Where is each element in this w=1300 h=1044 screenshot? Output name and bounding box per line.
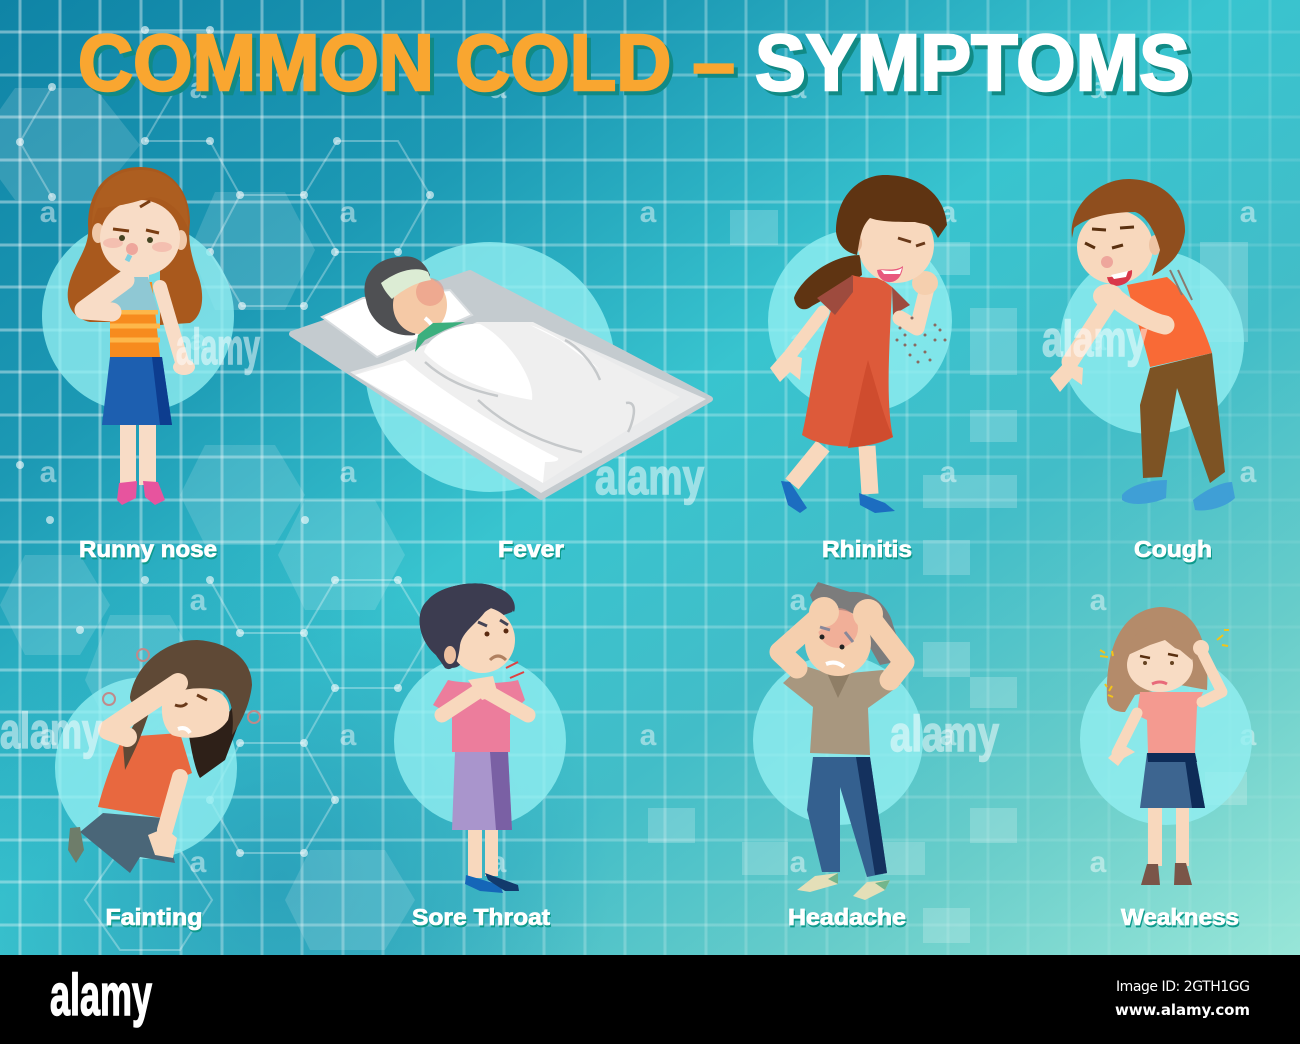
watermark: alamy tiles: a <box>190 324 207 357</box>
label: cough: Cough <box>1134 536 1212 562</box>
symptom: fever <box>292 242 710 497</box>
symptom: runny nose <box>42 167 234 505</box>
watermark: alamy tiles: a <box>640 196 657 229</box>
symptom: cough <box>1050 179 1244 510</box>
watermark: alamy tiles: a <box>1090 584 1107 617</box>
watermark: alamy tiles: a <box>340 456 357 489</box>
label: fainting: Fainting <box>106 904 202 930</box>
label: cough: Cough <box>1135 538 1213 564</box>
watermark: alamy tiles: a <box>1090 324 1107 357</box>
footer bar <box>0 955 1300 1044</box>
watermark: alamy tiles: a <box>490 584 507 617</box>
label: sore throat: Sore Throat <box>413 906 551 932</box>
label: fever: Fever <box>498 536 564 562</box>
watermark: alamy tiles: a <box>940 719 957 752</box>
watermark: alamy tiles: a <box>1240 196 1257 229</box>
watermark: alamy tiles: a <box>1240 719 1257 752</box>
title: COMMON COLD – <box>82 22 739 111</box>
watermark: alamy tiles: a <box>490 72 507 105</box>
symptom: sore throat <box>394 583 566 893</box>
title: SYMPTOMS <box>759 22 1194 111</box>
watermark: alamy words: alamy <box>1042 311 1147 367</box>
watermark: alamy tiles: a <box>790 584 807 617</box>
watermark: alamy words: alamy <box>890 706 999 762</box>
watermark: alamy tiles: a <box>340 719 357 752</box>
watermark: alamy tiles: a <box>790 72 807 105</box>
watermark: alamy tiles: a <box>490 324 507 357</box>
watermark: alamy tiles: a <box>40 719 57 752</box>
alamy logo: alamy <box>50 963 152 1028</box>
label: headache: Headache <box>788 904 906 930</box>
label: runny nose: Runny nose <box>80 538 218 564</box>
watermark: alamy tiles: a <box>1240 456 1257 489</box>
symptom: weakness <box>1080 607 1252 885</box>
watermark: alamy words: alamy <box>595 449 704 505</box>
watermark: alamy tiles: a <box>640 719 657 752</box>
symptom: rhinitis <box>768 175 952 513</box>
title: SYMPTOMS <box>755 18 1190 107</box>
title <box>78 18 1194 111</box>
watermark: alamy tiles: a <box>490 846 507 879</box>
label: rhinitis: Rhinitis <box>823 538 913 564</box>
watermark: alamy tiles: a <box>190 72 207 105</box>
watermark: alamy tiles: a <box>1090 846 1107 879</box>
label: rhinitis: Rhinitis <box>822 536 912 562</box>
symptom: fainting <box>55 640 260 873</box>
watermark: alamy tiles: a <box>190 584 207 617</box>
watermark: alamy tiles <box>40 72 1257 879</box>
label: sore throat: Sore Throat <box>412 904 550 930</box>
watermark: alamy tiles: a <box>340 196 357 229</box>
watermark: alamy words <box>0 311 1147 762</box>
label: runny nose: Runny nose <box>79 536 217 562</box>
watermark: alamy words: alamy <box>176 319 260 375</box>
watermark: alamy tiles: a <box>940 196 957 229</box>
watermark: alamy tiles: a <box>790 324 807 357</box>
watermark: alamy words: alamy <box>0 703 102 759</box>
label: weakness: Weakness <box>1122 906 1240 932</box>
label: fainting: Fainting <box>106 906 204 932</box>
label: weakness: Weakness <box>1121 904 1239 930</box>
label: headache: Headache <box>789 906 907 932</box>
watermark: alamy tiles: a <box>790 846 807 879</box>
website: www.alamy.com <box>1115 1001 1250 1019</box>
symptom: headache <box>753 582 923 900</box>
title: COMMON COLD – <box>78 18 735 107</box>
label: fever: Fever <box>499 538 565 564</box>
watermark: alamy tiles: a <box>1090 72 1107 105</box>
image id: Image ID: 2GTH1GG <box>1116 979 1250 995</box>
watermark: alamy tiles: a <box>40 456 57 489</box>
watermark: alamy tiles: a <box>40 196 57 229</box>
watermark: alamy tiles: a <box>940 456 957 489</box>
watermark: alamy tiles: a <box>190 846 207 879</box>
